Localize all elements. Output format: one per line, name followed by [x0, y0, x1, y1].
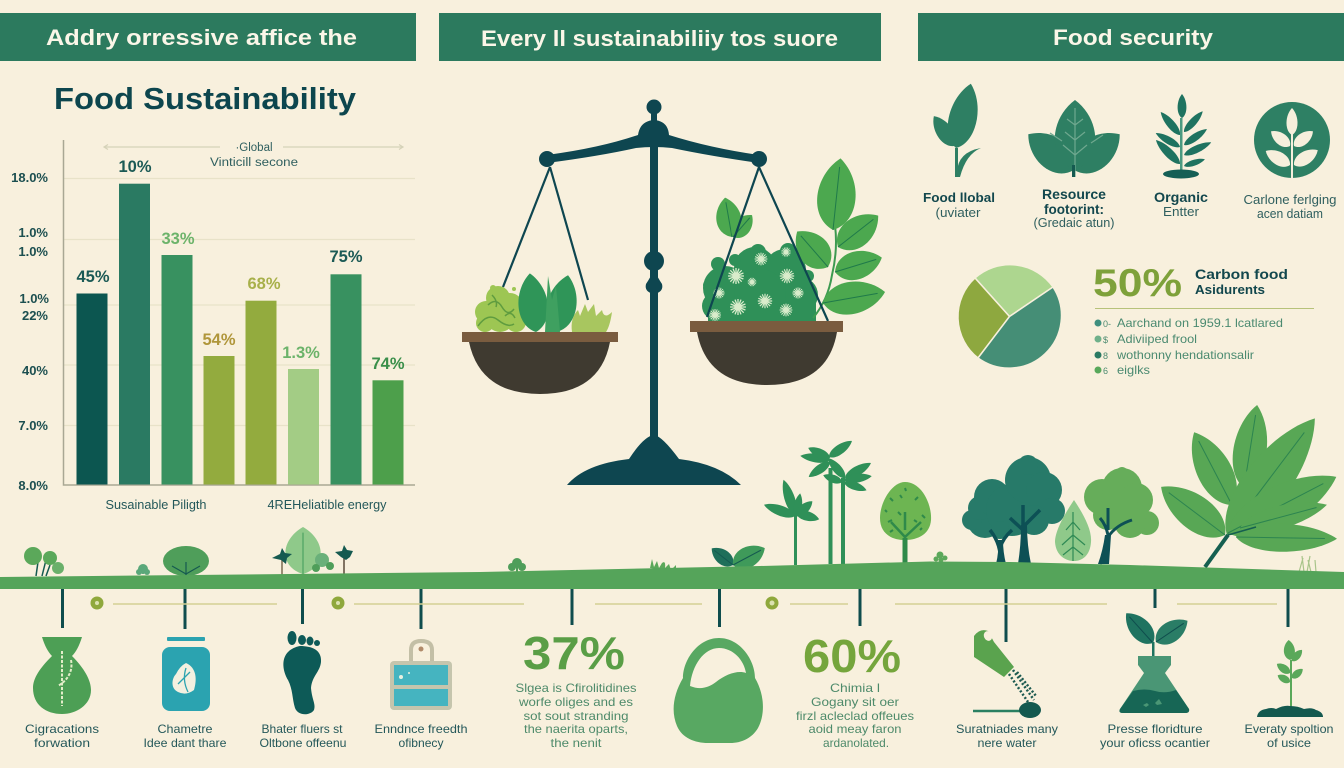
icon: leaf badge	[1254, 102, 1330, 178]
bar value labels: 1.3%	[282, 344, 320, 362]
item: pouring scoop icon and caption: Suratniades many	[956, 722, 1058, 736]
grass tuft	[1299, 556, 1316, 572]
bar value labels: 74%	[371, 355, 405, 373]
pale leaf tree	[1055, 500, 1091, 561]
y axis labels	[11, 170, 49, 493]
stat: 60%: Chimia l	[830, 681, 880, 695]
item: bag icon and caption	[25, 637, 99, 750]
balance scale illustration	[462, 100, 888, 485]
icon labels: Carlone ferlging	[1244, 193, 1337, 207]
item: jar icon and caption	[144, 637, 227, 750]
stat: 37%: the naerita oparts,	[524, 722, 628, 736]
chart legend note	[104, 142, 403, 169]
icon labels: (uviater	[936, 206, 980, 220]
item: lock box icon and caption	[374, 641, 468, 750]
item: footprint icon and caption	[260, 631, 346, 750]
timeline connectors	[62, 589, 1288, 642]
item: pouring scoop icon and caption: nere water	[978, 736, 1036, 750]
icon labels	[923, 187, 1337, 230]
item: seedling icon and caption	[1244, 640, 1334, 750]
stat legend list: eiglks	[1117, 363, 1150, 377]
item: bag icon and caption: Cigracations	[25, 722, 99, 736]
item: flask plant icon and caption	[1100, 606, 1210, 750]
bar value labels: 33%	[161, 230, 195, 248]
icon row: food security	[923, 81, 1337, 230]
ground band	[0, 562, 1344, 589]
stat: 60%: 60%	[803, 630, 901, 682]
right pan bush	[702, 243, 818, 322]
bar value labels	[76, 158, 405, 373]
round tree	[880, 482, 931, 563]
pie chart	[958, 265, 1061, 368]
stat legend list: Aarchand on 1959.1 lcatlared	[1117, 316, 1283, 330]
icon: sprout	[927, 81, 984, 177]
bars	[76, 184, 404, 484]
bar value labels: 68%	[247, 275, 281, 293]
bar value labels: 75%	[329, 248, 363, 266]
item: flask plant icon and caption: Presse floridture	[1108, 722, 1203, 736]
item: bag icon and caption: forwation	[34, 736, 90, 750]
chart legend note: Vinticill secone	[210, 157, 298, 169]
y axis labels: 7.0%	[18, 418, 48, 433]
header: left banner: Addry orressive affice the	[46, 25, 357, 50]
stat: 60%	[796, 630, 914, 750]
item: lock box icon and caption: ofibnecy	[398, 736, 444, 750]
icon: organic plant	[1153, 94, 1213, 178]
item: jar icon and caption: Chametre	[158, 722, 213, 736]
stat: 37%: sot sout stranding	[524, 709, 628, 723]
stat panel: 50% carbon food: 50%	[1093, 262, 1182, 305]
stat legend list: 6	[1103, 366, 1108, 376]
item: lock box icon and caption: Enndnce freedth	[374, 722, 468, 736]
y axis labels: 1.0%	[18, 225, 48, 240]
stat panel: 50% carbon food: Asidurents	[1195, 282, 1265, 297]
landscape trees on ground	[24, 402, 1344, 576]
bar value labels: 45%	[76, 268, 110, 286]
icon labels: acen datiam	[1257, 207, 1323, 221]
x axis labels	[106, 498, 387, 512]
stat: 60%: firzl acleclad offeues	[796, 709, 914, 723]
y axis labels: 1.0%	[19, 291, 49, 306]
item: seedling icon and caption: of usice	[1267, 736, 1311, 750]
left pan plants	[475, 272, 612, 335]
icon labels: Entter	[1163, 205, 1199, 219]
item: flask plant icon and caption: your oficss ocantier	[1100, 736, 1210, 750]
stat legend list: 8	[1103, 351, 1108, 361]
tiny shrub	[934, 552, 948, 562]
light green tree	[1084, 467, 1159, 564]
right pan	[690, 321, 843, 385]
y axis labels: 1.0%	[18, 244, 48, 259]
y axis labels: 40%	[22, 363, 48, 378]
icon: round bag	[674, 638, 763, 743]
stat legend list	[1094, 316, 1283, 377]
header: left banner	[0, 13, 416, 61]
y axis labels: 8.0%	[18, 478, 48, 493]
scale strings	[503, 167, 828, 321]
dark leafy trees	[962, 455, 1065, 564]
stat legend list: 0-	[1103, 319, 1111, 329]
y axis labels: 18.0%	[11, 170, 48, 185]
stat legend list: wothonny hendationsalir	[1116, 348, 1254, 362]
icon labels: Resource	[1042, 187, 1107, 202]
scale beam and post	[539, 100, 767, 485]
stat: 37%: worfe oliges and es	[518, 695, 633, 709]
bar value labels: 10%	[118, 158, 152, 176]
large leaf plant	[1151, 402, 1344, 567]
stat: 60%: aoid meay faron	[808, 722, 902, 736]
icon labels: Food llobal	[923, 191, 995, 205]
icon labels: (Gredaic atun)	[1034, 216, 1114, 230]
stat panel: 50% carbon food: Carbon food	[1195, 267, 1288, 282]
chart legend note: ·Global	[235, 142, 273, 154]
bar value labels: 54%	[202, 331, 236, 349]
icon labels: Organic	[1154, 189, 1208, 205]
item: pouring scoop icon and caption	[956, 630, 1058, 750]
stat: 60%: Gogany sit oer	[811, 695, 899, 709]
item: seedling icon and caption: Everaty spoltion	[1244, 722, 1334, 736]
x axis labels: Susainable Piligth	[106, 498, 207, 512]
stat legend list: $	[1103, 335, 1108, 345]
item: footprint icon and caption: Oltbone offeenu	[260, 736, 346, 750]
stat: 37%: 37%	[523, 627, 625, 679]
right pan leafy branch	[713, 156, 888, 319]
icon labels: footorint:	[1044, 202, 1104, 217]
header: middle banner	[439, 13, 881, 61]
small trees middle left	[272, 527, 353, 575]
item: jar icon and caption: Idee dant thare	[144, 736, 227, 750]
left pan	[462, 332, 618, 394]
y axis labels: 22%	[22, 308, 48, 323]
stat: 60%: ardanolated.	[823, 736, 889, 750]
sprout leaves on ground	[707, 539, 770, 574]
item: footprint icon and caption: Bhater fluers st	[262, 722, 343, 736]
small shrub and grass	[508, 558, 676, 573]
stat: 37%: the nenit	[550, 736, 602, 750]
stat panel: 50% carbon food	[1093, 262, 1314, 377]
stat: 37%: Slgea is Cfirolitidines	[516, 681, 636, 695]
x axis labels: 4REHeliatible energy	[268, 498, 387, 512]
header: middle banner: Every ll sustainabiliiy tos suore	[481, 26, 838, 51]
palm trees	[762, 437, 873, 565]
header: right banner: Food security	[1053, 25, 1214, 50]
stat: 37%	[516, 627, 636, 750]
bar chart	[11, 140, 415, 512]
icon: broad leaf	[1018, 100, 1130, 183]
title: Food Sustainability	[54, 81, 357, 116]
small trees left	[24, 546, 209, 576]
header: right banner	[918, 13, 1344, 61]
stat legend list: Adiviiped frool	[1117, 332, 1197, 346]
